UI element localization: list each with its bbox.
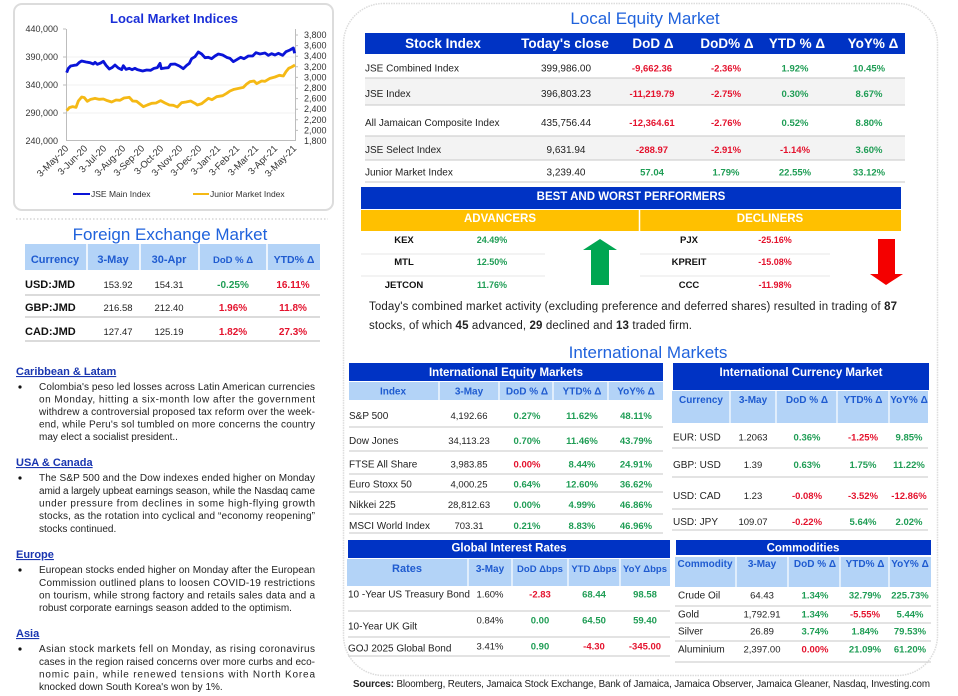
row Silver: 3.74% [802,626,829,638]
row USD: JPY: 2.02% [896,517,923,528]
row USD: JPY: 109.07 [738,517,768,528]
row CAD:JMD: CAD:JMD [25,326,76,338]
panel: commodities [675,540,931,662]
right axis labels: 2,200 [304,115,327,125]
row Crude Oil: 32.79% [849,590,882,602]
row MSCI World Index: 0.21% [514,521,541,532]
table header: YTD % Δ [769,36,825,51]
row FTSE All Share [349,460,653,470]
table title: Global Interest Rates [451,542,567,554]
row JSE Select Index: 3.60% [856,145,883,156]
row Gold: Gold [678,610,699,620]
x axis date labels: 3-Aug-20 [93,143,128,179]
row USD: CAD: 1.23 [744,491,762,502]
row JSE Combined Index: 399,986.00 [541,64,591,74]
table header: YTD% Δ [563,386,601,398]
table header: YoY% Δ [617,386,655,398]
row GBP: USD: 1.75% [850,460,877,471]
left axis labels: 240,000 [25,136,58,146]
row GBP:JMD [25,302,307,314]
table header: YoY% Δ [848,36,899,51]
decliners list: -11.98% [758,280,792,290]
news: Caribbean and Latam: on Monday, hitting a six-month low after the government [39,394,315,406]
news: Europe: robust corporate earnings season added to the optimism. [39,603,292,614]
decliners list: KPREIT [672,257,707,268]
chart legend [73,189,285,199]
panel: best and worst performers [361,187,903,291]
decliners list: -25.16% [758,235,792,245]
row All Jamaican Composite Index: -12,364.61 [629,118,675,129]
row Dow Jones: Dow Jones [349,436,398,447]
x axis date labels: 3-Apr-21 [246,143,280,177]
table header: DoD Δbps [517,564,563,575]
row Nikkei 225 [349,500,653,511]
panel: local market indices chart [14,4,333,210]
row USD: JPY [673,517,923,528]
row GOJ 2025 Global Bond: -4.30 [583,642,605,652]
row All Jamaican Composite Index: All Jamaican Composite Index [365,118,500,129]
panel: local equity market [365,9,905,182]
row Crude Oil: 1.34% [802,590,829,602]
row Gold: 1,792.91 [744,610,780,620]
row S&P 500: 48.11% [620,411,652,422]
row JSE Combined Index: JSE Combined Index [365,64,459,74]
table header [405,36,899,51]
table header: 3-May [739,395,768,406]
row EUR: USD: -1.25% [848,432,879,444]
row FTSE All Share: 8.44% [569,460,596,470]
panel: global interest rates [347,540,670,656]
x axis date labels: 3-Jan-21 [189,143,223,178]
row Euro Stoxx 50: 36.62% [620,480,653,490]
table header: Today's close [521,36,609,51]
table header: DoD % Δ [794,559,836,570]
row Silver: 1.84% [852,626,879,638]
subheading: decliners: DECLINERS [737,213,804,225]
table header: Stock Index [405,36,481,51]
row Crude Oil: 225.73% [891,590,929,602]
row USD:JMD: USD:JMD [25,279,75,291]
row JSE Combined Index: -9,662.36 [632,64,672,74]
panel: foreign exchange market [25,225,320,341]
row Junior Market Index: 3,239.40 [547,168,586,178]
row USD:JMD: 154.31 [154,280,184,291]
news: Caribbean and Latam: end, while Peru's sol tumbled on more concerns the country [39,420,315,430]
table header: 30-Apr [152,254,187,266]
news: Caribbean and Latam: may elect a socialist president.. [39,432,178,443]
market activity summary [369,301,897,332]
news: Europe: Commission outlined plans to loosen COVID-19 restrictions [39,578,315,589]
row Aluminium: 0.00% [802,644,829,656]
row Nikkei 225: 28,812.63 [448,500,490,511]
table header [678,559,929,570]
row All Jamaican Composite Index: 435,756.44 [541,118,591,129]
row Nikkei 225: 4.99% [569,500,596,511]
row Euro Stoxx 50: Euro Stoxx 50 [349,480,412,490]
row Junior Market Index [365,168,886,178]
row EUR: USD [673,432,923,444]
row JSE Select Index: -2.91% [711,145,742,156]
row JSE Combined Index [365,64,886,74]
row USD: CAD [673,491,927,502]
row JSE Index: 0.30% [782,89,809,100]
advancers list: 12.50% [477,257,507,267]
decliners list: PJX [680,235,699,246]
x axis date labels: 3-May-20 [35,143,71,179]
news: Asia: knocked down South Korea's won by 1%. [39,682,223,693]
table header: YTD% Δ [844,395,882,406]
news: Caribbean and Latam [16,366,315,443]
table header: 3-May [476,564,505,575]
row USD: CAD: -0.08% [792,491,823,502]
row Nikkei 225: Nikkei 225 [349,500,396,511]
news: USA and Canada: stocks continued. [39,524,116,535]
row JSE Index: JSE Index [365,89,411,100]
row Silver [678,626,927,638]
row MSCI World Index [349,521,653,532]
news: Europe [16,549,315,614]
table header: DoD % Δ [786,395,828,406]
x axis date labels: 3-Feb-21 [207,143,242,178]
row 10-Year US Treasury Bond: -2.83 [529,590,551,600]
row USD: CAD: -3.52% [848,491,879,502]
table header [380,386,655,398]
left axis labels: 340,000 [25,80,58,90]
row GOJ 2025 Global Bond: 0.90 [531,642,549,652]
row GBP:JMD: GBP:JMD [25,302,76,314]
right axis labels: 2,800 [304,83,327,93]
right axis labels: 2,600 [304,94,327,104]
row JSE Index: 396,803.23 [541,89,591,100]
row EUR: USD: EUR: USD [673,432,721,444]
table header: Rates [392,563,422,575]
row S&P 500: 0.27% [514,411,541,422]
row USD: CAD: USD: CAD [673,491,721,502]
right axis labels: 3,600 [304,41,327,51]
row Aluminium: 2,397.00 [744,644,780,656]
news: Caribbean and Latam: withdrew a controversial proposed tax reform over the week- [38,407,315,418]
sources footer: Sources: Bloomberg, Reuters, Jamaica Stock Exchange, Bank of Jamaica, Jamaica Observer, Jamaica Gleaner, Nasdaq, Investing.com [353,679,930,690]
table header: DoD % Δ [213,255,253,266]
table header: YoY% Δ [891,559,929,570]
right axis labels: 2,000 [304,125,327,135]
x axis date labels: 3-Oct-20 [132,143,166,177]
row JSE Select Index: -288.97 [636,145,668,156]
line: Junior Market Index [67,65,295,111]
row JSE Select Index: 9,631.94 [547,145,586,156]
row All Jamaican Composite Index: -2.76% [711,118,742,129]
table header: YoY% Δ [890,395,928,406]
news: USA and Canada: The S&P 500 and the Dow indexes ended higher on Monday [39,473,315,484]
left axis labels: 440,000 [25,24,58,34]
x axis date labels: 3-Nov-20 [150,143,185,179]
row Gold [678,610,924,620]
decliners list: CCC [679,280,699,291]
row All Jamaican Composite Index: 8.80% [856,118,883,129]
news: Asia [16,628,315,693]
row Dow Jones [349,436,653,447]
news: Caribbean and Latam: Colombia's peso led losses across Latin American currencies [39,382,315,393]
row 10-Year UK Gilt: 10-Year UK Gilt [348,622,417,632]
table header: YTD% Δ [846,559,884,570]
market activity summary: Today's combined market activity (excluding preference and deferred shares) resulted in trading of 87 [369,301,897,313]
right axis labels: 3,200 [304,62,327,72]
row JSE Combined Index: -2.36% [711,64,742,74]
row S&P 500: 4,192.66 [451,411,487,422]
row GBP:JMD: 216.58 [103,303,133,314]
row GBP: USD [673,460,925,471]
left axis labels: 290,000 [25,108,58,118]
x axis date labels: 3-Jul-20 [77,143,109,175]
row Gold: 5.44% [897,610,924,620]
row GBP: USD: 0.63% [794,460,821,471]
panel: international currency market [672,363,929,530]
row FTSE All Share: FTSE All Share [349,460,418,470]
row All Jamaican Composite Index: 0.52% [782,118,809,129]
icon: red down arrow [870,239,903,285]
table header [31,254,315,266]
row 10-Year US Treasury Bond [348,590,657,600]
table header: Currency [679,395,723,406]
news: Europe: on tourism, while strong factory and retails sales data and a [39,590,315,602]
row 10-Year US Treasury Bond: 68.44 [582,590,607,600]
decliners list: -15.08% [758,257,792,267]
table header: 3-May [97,254,129,266]
advancers list: JETCON [385,280,423,291]
panel: international equity markets [349,363,663,533]
news: Asia: Asian stock markets fell on Monday, as rising coronavirus [39,644,315,655]
subheading: advancers: ADVANCERS [464,213,536,225]
row USD: JPY: -0.22% [792,517,823,528]
row Dow Jones: 11.46% [566,436,598,447]
x axis date labels: 3-Sep-20 [112,143,147,179]
right axis labels: 3,000 [304,72,327,82]
row Aluminium: 21.09% [849,644,882,656]
table header: DoD Δ [632,36,674,51]
table header [392,563,667,575]
x axis date labels [35,143,299,179]
row 10-Year UK Gilt: 0.00 [531,616,549,626]
row Euro Stoxx 50: 12.60% [566,480,599,490]
row Junior Market Index: 33.12% [853,168,886,178]
row Nikkei 225: 46.86% [620,500,653,511]
left axis labels: 390,000 [25,52,58,62]
row JSE Index: -2.75% [711,89,742,100]
row GOJ 2025 Global Bond: GOJ 2025 Global Bond [348,644,451,654]
news: Europe: European stocks ended higher on Monday after the European [39,565,315,576]
table header: YTD Δbps [571,564,617,575]
row JSE Select Index: -1.14% [780,145,811,156]
right axis labels: 3,400 [304,51,327,61]
row CAD:JMD: 1.82% [219,327,247,338]
row GBP:JMD: 11.8% [279,303,307,314]
row USD: CAD: -12.86% [891,491,927,502]
table title: Commodities [767,542,839,554]
row Crude Oil: 64.43 [750,590,774,602]
row S&P 500 [349,411,652,422]
row MSCI World Index: 703.31 [454,521,484,532]
row Crude Oil: Crude Oil [678,590,720,602]
left axis labels [25,24,58,146]
right axis labels [304,30,327,146]
table header [679,395,928,406]
row 10-Year UK Gilt: 59.40 [633,616,657,626]
right axis labels: 2,400 [304,104,327,114]
row GOJ 2025 Global Bond: -345.00 [629,642,661,652]
heading: foreign exchange market: Foreign Exchange Market [73,225,268,244]
heading: best and worst performers: BEST AND WORST PERFORMERS [537,191,726,203]
row 10-Year UK Gilt: 0.84% [477,616,504,626]
right axis labels: 1,800 [304,136,327,146]
row GBP: USD: 1.39 [744,460,762,471]
table header: YoY Δbps [623,564,667,575]
row 10-Year UK Gilt: 64.50 [582,616,606,626]
row FTSE All Share: 24.91% [620,460,653,470]
advancers list: 11.76% [477,280,507,290]
row Crude Oil [678,590,929,602]
news: Asia: cases in the region raised concerns over more curbs and eco- [39,657,315,668]
row USD: JPY: USD: JPY [673,517,718,528]
news: USA and Canada: stocks, as the rotation into cyclical and “economy reopening” [39,511,315,522]
icon: green up arrow [583,239,617,285]
row Nikkei 225: 0.00% [514,500,541,511]
market activity summary: stocks, of which 45 advanced, 29 declined and 13 traded firm. [369,320,692,332]
row JSE Index: -11,219.79 [630,89,674,100]
row 10-Year US Treasury Bond: 10 -Year US Treasury Bond [348,590,470,600]
row Junior Market Index: Junior Market Index [365,168,453,178]
advancers list: MTL [394,257,414,268]
x axis date labels: 3-Mar-21 [226,143,261,178]
chart title: Local Market Indices [110,11,238,26]
news: USA and Canada [16,457,315,535]
row Silver: 26.89 [750,626,774,638]
x axis date labels: 3-Jun-20 [56,143,90,178]
row 10-Year UK Gilt [348,616,657,632]
heading: Asia: Asia [16,628,40,640]
row Junior Market Index: 1.79% [713,168,740,178]
row MSCI World Index: 46.96% [620,521,653,532]
row Dow Jones: 0.70% [514,436,541,447]
row FTSE All Share: 0.00% [514,460,541,470]
row JSE Select Index [365,145,883,156]
heading: local equity market: Local Equity Market [570,9,720,28]
row EUR: USD: 9.85% [896,432,923,444]
table header: Currency [31,254,80,266]
row Dow Jones: 43.79% [620,436,653,447]
row Euro Stoxx 50: 4,000.25 [451,480,487,490]
row Junior Market Index: 22.55% [779,168,812,178]
row Gold: -5.55% [850,610,881,620]
row USD: JPY: 5.64% [850,517,877,528]
row Silver: 79.53% [894,626,927,638]
row FTSE All Share: 3,983.85 [451,460,487,470]
row JSE Select Index: JSE Select Index [365,145,441,156]
row Dow Jones: 34,113.23 [448,436,490,447]
news: USA and Canada: amid a largely upbeat earnings season, while the Nasdaq came [39,486,315,497]
row USD:JMD: -0.25% [217,280,249,291]
row 10-Year US Treasury Bond: 98.58 [633,590,657,600]
row S&P 500: S&P 500 [349,411,389,422]
row USD:JMD [25,279,310,291]
row GBP: USD: 11.22% [893,460,925,471]
table title: International Equity Markets [429,367,583,379]
x axis date labels: 3-Dec-20 [169,143,204,179]
row GBP: USD: GBP: USD [673,460,721,471]
row MSCI World Index: 8.83% [569,521,596,532]
table header: DoD % Δ [506,386,548,398]
table title: International Currency Market [720,367,883,379]
row Aluminium [678,644,927,656]
row USD:JMD: 153.92 [103,280,133,291]
table header: 3-May [748,559,777,570]
row JSE Index [365,89,883,100]
row Euro Stoxx 50: 0.64% [514,480,541,490]
row CAD:JMD: 27.3% [279,327,307,338]
row S&P 500: 11.62% [566,411,598,422]
heading: Europe: Europe [16,549,54,561]
table header: 3-May [455,386,484,398]
row Junior Market Index: 57.04 [640,168,665,178]
row Gold: 1.34% [802,610,829,620]
row GOJ 2025 Global Bond: 3.41% [477,642,504,652]
heading: Caribbean & Latam: Caribbean & Latam [16,366,116,378]
row Aluminium: 61.20% [894,644,927,656]
row Euro Stoxx 50 [349,480,653,490]
decliners list [672,235,792,291]
row All Jamaican Composite Index [365,118,883,129]
row USD:JMD: 16.11% [276,280,310,291]
advancers list: 24.49% [477,235,507,245]
row Aluminium: Aluminium [678,644,725,656]
table header: YTD% Δ [274,254,315,266]
advancers list [385,235,507,291]
news: Asia: nomic pain, while renewed tensions with North Korea [39,670,315,680]
table header: Commodity [678,559,733,570]
row CAD:JMD [25,326,307,338]
line: JSE Main Index [67,48,295,73]
row JSE Combined Index: 10.45% [853,64,886,74]
x axis date labels: 3-May-21 [263,143,299,179]
table header: DoD% Δ [700,36,754,51]
heading: USA & Canada: USA & Canada [16,457,93,469]
row EUR: USD: 1.2063 [738,432,768,444]
chart legend: Junior Market Index [210,189,285,199]
news: USA and Canada: under pressure from declines in some high-flying growth [39,498,315,510]
row CAD:JMD: 127.47 [103,327,133,338]
row GBP:JMD: 212.40 [154,303,184,314]
table header: Index [380,386,406,398]
advancers list: KEX [394,235,414,246]
right axis labels: 3,800 [304,30,327,40]
row 10-Year US Treasury Bond: 1.60% [477,590,504,600]
row CAD:JMD: 125.19 [154,327,184,338]
row GBP:JMD: 1.96% [219,303,247,314]
row EUR: USD: 0.36% [794,432,821,444]
row JSE Index: 8.67% [856,89,883,100]
row JSE Combined Index: 1.92% [782,64,809,74]
chart legend: JSE Main Index [91,189,151,199]
row MSCI World Index: MSCI World Index [349,521,430,532]
row Silver: Silver [678,626,704,638]
heading: international markets: International Markets [569,343,727,362]
row GOJ 2025 Global Bond [348,642,661,654]
